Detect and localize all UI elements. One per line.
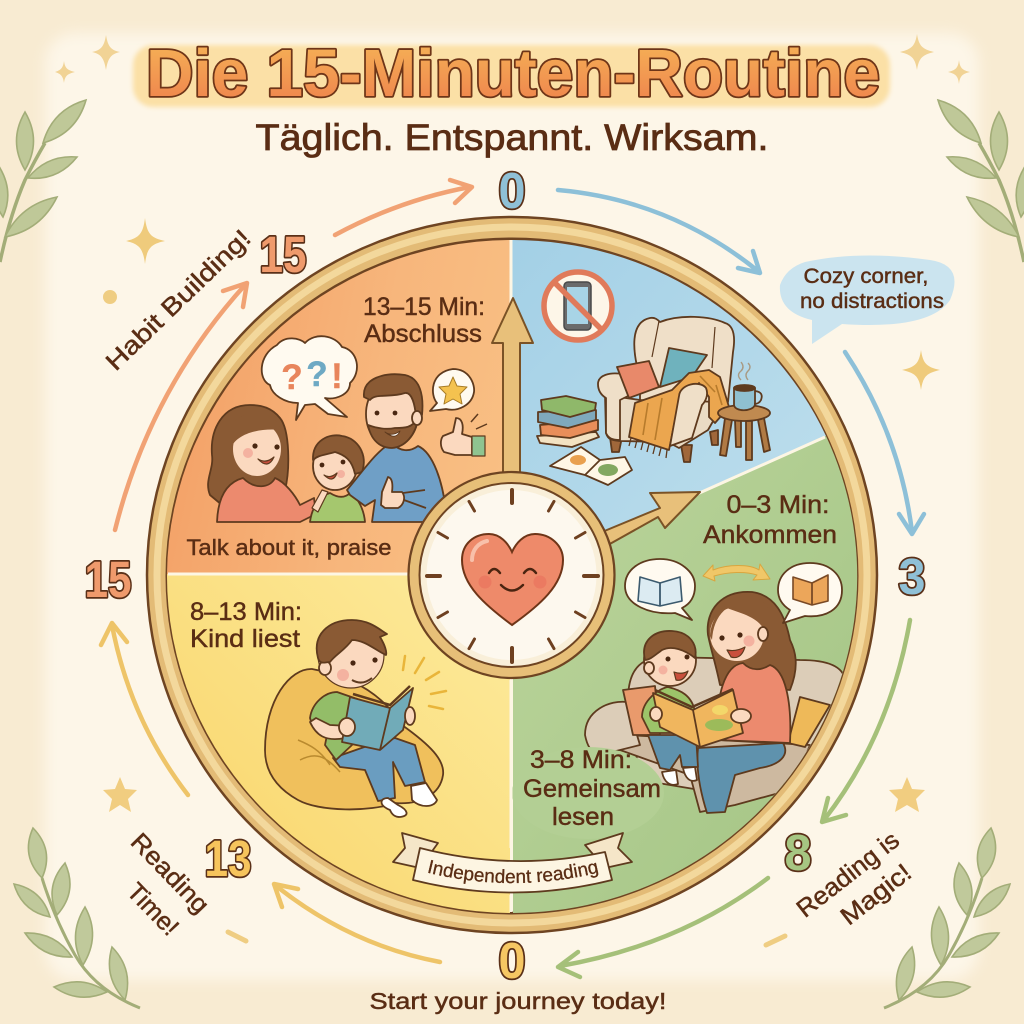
legs: [610, 430, 718, 462]
father: [347, 443, 447, 522]
arrow: 13 to 15: [101, 623, 188, 795]
illustration: open book: [550, 447, 632, 485]
arrow: pointer right: [602, 492, 700, 545]
icon: smiling heart: [462, 534, 563, 625]
heading: Abschluss: Abschluss: [364, 320, 482, 348]
illustration: family: ?: [306, 355, 328, 394]
illustration: side table and cup: [718, 362, 770, 460]
back: [634, 317, 734, 402]
clock ticks: [427, 490, 598, 662]
bubble: open book: [625, 559, 695, 620]
arrow: 0 to cozy corner: [558, 190, 760, 273]
number 15 left: 15: [84, 551, 132, 608]
cycle numbers: [84, 162, 926, 989]
title: Die 15-Minuten-Routine: [146, 36, 880, 111]
divider lines: [168, 240, 825, 912]
subtitle: Täglich. Entspannt. Wirksam.: [256, 117, 768, 158]
routine wheel: [146, 216, 878, 934]
decorative leaves: top left: [0, 100, 86, 262]
jeans: [333, 738, 425, 801]
footer caption: Start your journey today!: [370, 988, 666, 1014]
left arm: [598, 373, 636, 440]
arrow: 15 to 15: [115, 283, 247, 530]
icon: exchange arrows: [703, 564, 770, 581]
caption: talk about it: Talk about it, praise: [186, 535, 392, 560]
arrow: 3 to 8: [822, 620, 910, 822]
heading: Kind liest: [190, 598, 302, 653]
panel: orange, conclusion: [167, 240, 510, 574]
heading: Abschluss: 13–15 Min:: [363, 293, 485, 321]
heading: Abschluss: [363, 293, 485, 348]
blanket: [629, 370, 729, 450]
bubble: closed book: [778, 563, 842, 623]
outer cycle arrows: [101, 180, 924, 977]
number 0 top: 0: [498, 162, 526, 219]
sofa: [628, 657, 845, 790]
panel: yellow, child reads: [167, 574, 510, 913]
shirt: [310, 692, 360, 760]
head: [318, 622, 384, 688]
illustration: family: !: [331, 357, 343, 396]
label: reading time: [121, 828, 215, 941]
heading: Gemeinsam lesen: lesen: [552, 803, 614, 831]
illustration: family: [208, 336, 487, 522]
arrow: cozy corner to 3: [845, 352, 924, 534]
wheel ring: [147, 217, 877, 933]
sparkles and stars: [55, 34, 970, 812]
banner: independent reading: Independent reading: [428, 860, 598, 884]
star bubble: [430, 369, 474, 411]
illustration: armchair: [598, 317, 734, 462]
book: [342, 688, 413, 750]
heading: Gemeinsam lesen: [523, 746, 661, 831]
arrow: pointer up: [492, 298, 533, 490]
icon: no phone: [544, 272, 612, 340]
thumbs up: [441, 418, 472, 455]
illustration: family: ?: [281, 358, 303, 397]
decorative leaves: bottom right: [884, 828, 1010, 1008]
base: [605, 395, 724, 448]
illustration: child on beanbag: [265, 620, 446, 817]
label: reading time: Reading: [125, 828, 215, 919]
heading: Kind liest: Kind liest: [190, 625, 300, 653]
label: reading is magic: Reading is: [791, 826, 905, 923]
mother: [708, 592, 796, 690]
heading: Gemeinsam lesen: 3–8 Min:: [530, 746, 632, 774]
child: [642, 687, 695, 733]
heading: Gemeinsam lesen: Gemeinsam: [523, 775, 661, 803]
label: reading time: Time!: [121, 877, 184, 941]
heading: Ankommen: Ankommen: [703, 521, 837, 549]
child: [310, 493, 365, 522]
callout: cozy corner: no distractions: [800, 290, 944, 313]
illustration: stack of books: [537, 396, 599, 447]
banner: independent reading: [392, 832, 633, 894]
number 15 upper: 15: [260, 226, 306, 283]
clock: [408, 472, 614, 678]
mother: [208, 405, 288, 505]
arrow: 15 to 0: [335, 180, 472, 235]
label: reading is magic: Magic!: [835, 858, 917, 931]
callout: cozy corner: [780, 255, 954, 344]
decorative leaves: bottom left: [14, 828, 140, 1008]
decorative leaves: top right: [938, 100, 1024, 262]
rays: [403, 656, 446, 709]
number 8: 8: [784, 824, 812, 881]
illustration: mother and child on sofa: [512, 591, 843, 814]
heading: Ankommen: 0–3 Min:: [726, 491, 830, 519]
number 13: 13: [204, 830, 252, 887]
number 3: 3: [898, 548, 926, 605]
label: habit building: Habit Building!: [100, 224, 257, 376]
arrow: 8 to 0: [558, 878, 768, 977]
panel: blue, cozy corner: [512, 240, 826, 574]
picture book: [653, 690, 743, 747]
right arm: [670, 384, 707, 446]
heading: Kind liest: 8–13 Min:: [190, 598, 302, 626]
heading: Ankommen: [703, 491, 837, 549]
thought bubble: [262, 336, 357, 420]
panel: green, reading together: [512, 436, 857, 913]
pillows: [617, 361, 659, 398]
callout: cozy corner: Cozy corner,: [804, 265, 928, 288]
arrow: 0 to 13: [274, 884, 440, 962]
decorative dots: [103, 290, 785, 945]
number 0 bottom: 0: [498, 932, 526, 989]
